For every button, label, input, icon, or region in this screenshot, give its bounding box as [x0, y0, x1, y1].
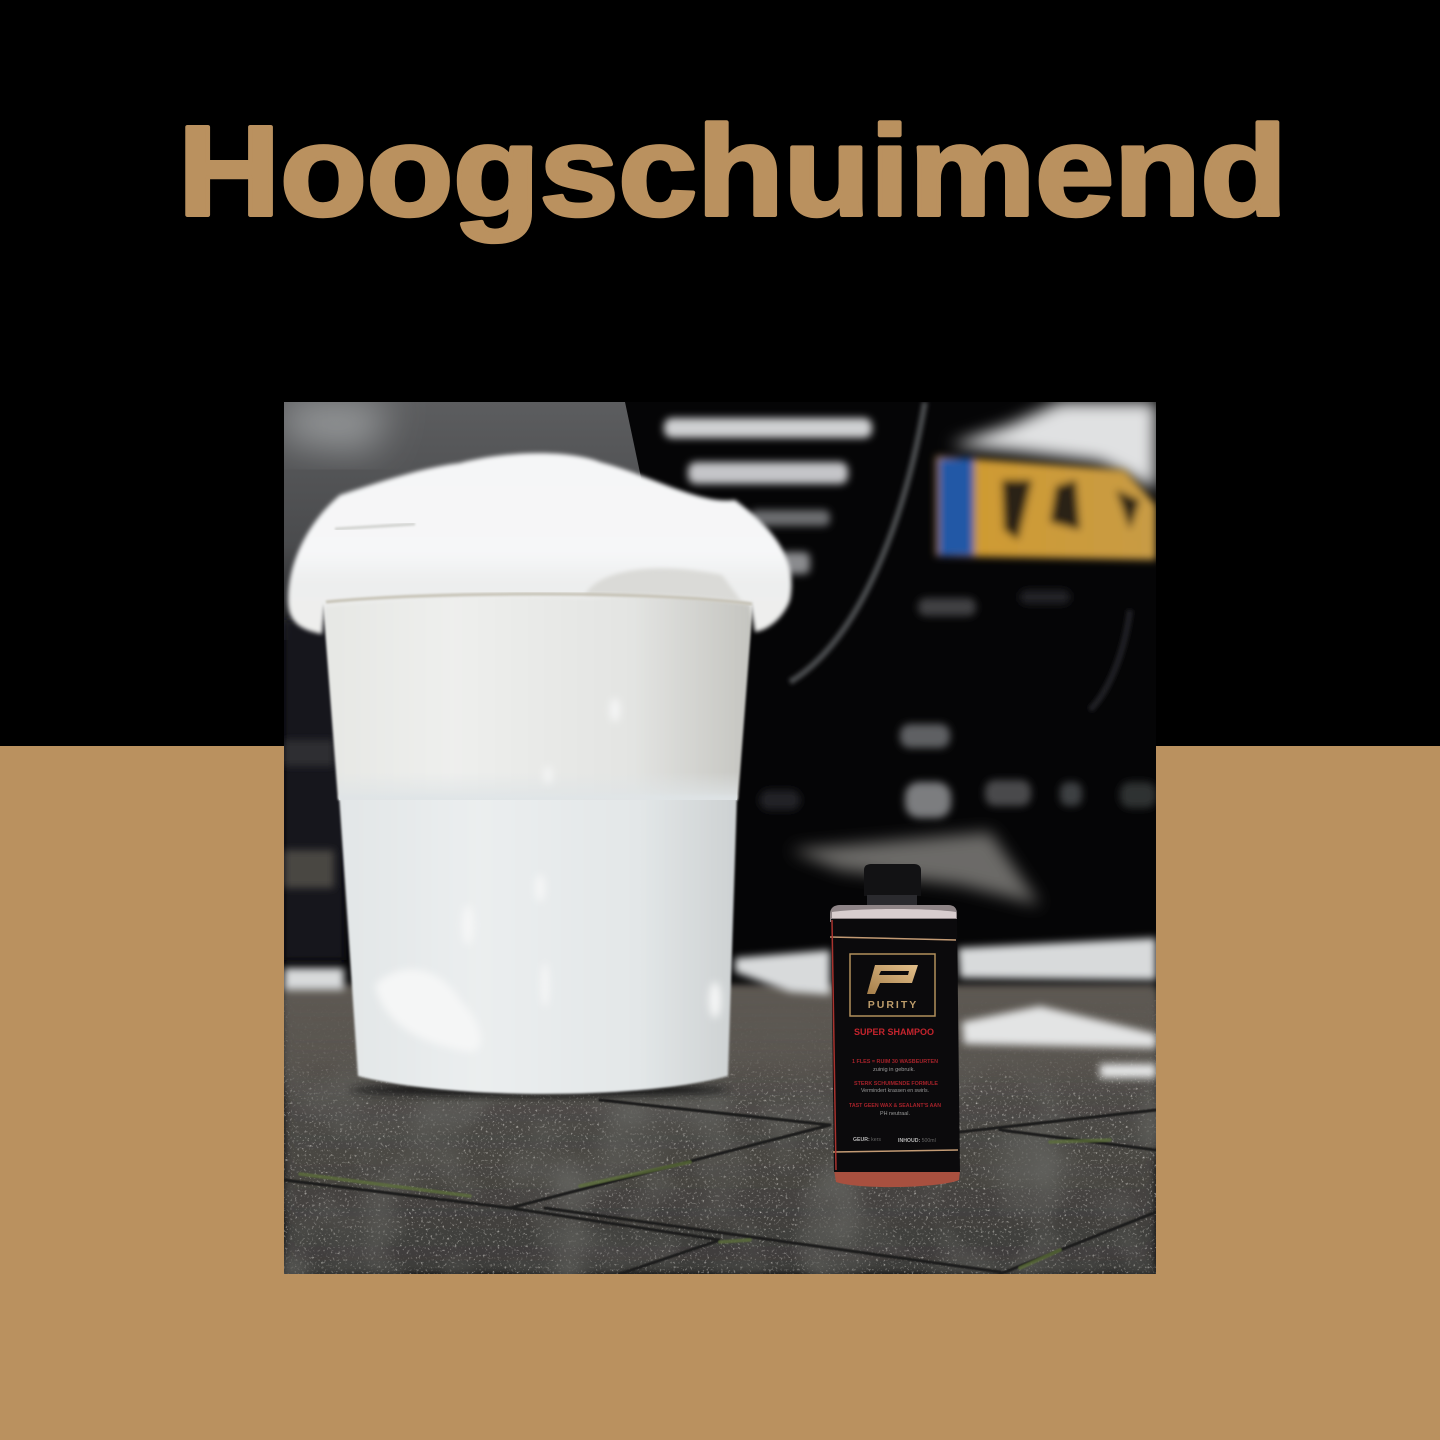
label benefits: TAST GEEN WAX & SEALANT'S AAN [849, 1103, 941, 1109]
label benefits: 1 FLES = RUIM 30 WASBEURTEN [852, 1059, 938, 1065]
label benefits [849, 1059, 941, 1117]
bucket body lower [339, 795, 737, 1094]
label gold lines [830, 937, 958, 1152]
bucket shadow [350, 1083, 730, 1097]
soft transition band [339, 780, 738, 800]
paver joints with moss [284, 1100, 1156, 1274]
blurred reflection on car [790, 832, 1040, 905]
snow top right [950, 402, 1156, 490]
background snow [284, 938, 1156, 1078]
bottle label [831, 919, 960, 1172]
foam shadow under rim [585, 568, 742, 602]
bucket drips [375, 698, 721, 1052]
label benefits: zuinig in gebruik. [873, 1067, 915, 1073]
background: black upper band [0, 0, 1440, 746]
logo mark P [867, 965, 918, 994]
logo frame [850, 954, 935, 1016]
label benefits: PH neutraal. [880, 1111, 910, 1117]
bucket [288, 453, 792, 1097]
photo: foam bucket and product bottle [284, 402, 1156, 1274]
car curved trim line [790, 402, 925, 682]
title: Hoogschuimend [178, 100, 1287, 243]
foam head [288, 453, 792, 634]
label benefits: Vermindert krassen en swirls. [861, 1088, 929, 1094]
brand name: PURITY [868, 999, 918, 1011]
number plate [936, 456, 1156, 560]
grille slats [664, 418, 872, 574]
bottle cap [864, 864, 921, 896]
ground pavers [284, 985, 1156, 1274]
bucket body upper [322, 590, 754, 800]
dark left car edge [284, 620, 344, 960]
label footer: GEUR: kers [853, 1137, 881, 1143]
background: tan lower band [0, 746, 1440, 1440]
blurred grey backdrop top left [284, 402, 650, 640]
label footer: INHOUD: 500ml [898, 1138, 936, 1144]
ground depth-of-field blur [284, 990, 1156, 1100]
label benefits: STERK SCHUIMENDE FORMULE [854, 1081, 939, 1087]
product name: SUPER SHAMPOO [854, 1027, 934, 1038]
bottle base [834, 1170, 960, 1187]
label footer [853, 1137, 936, 1142]
photo background: dark car [284, 746, 1156, 1274]
bumper details [760, 590, 1156, 818]
bottle shoulder [830, 905, 957, 922]
product bottle [830, 864, 960, 1187]
